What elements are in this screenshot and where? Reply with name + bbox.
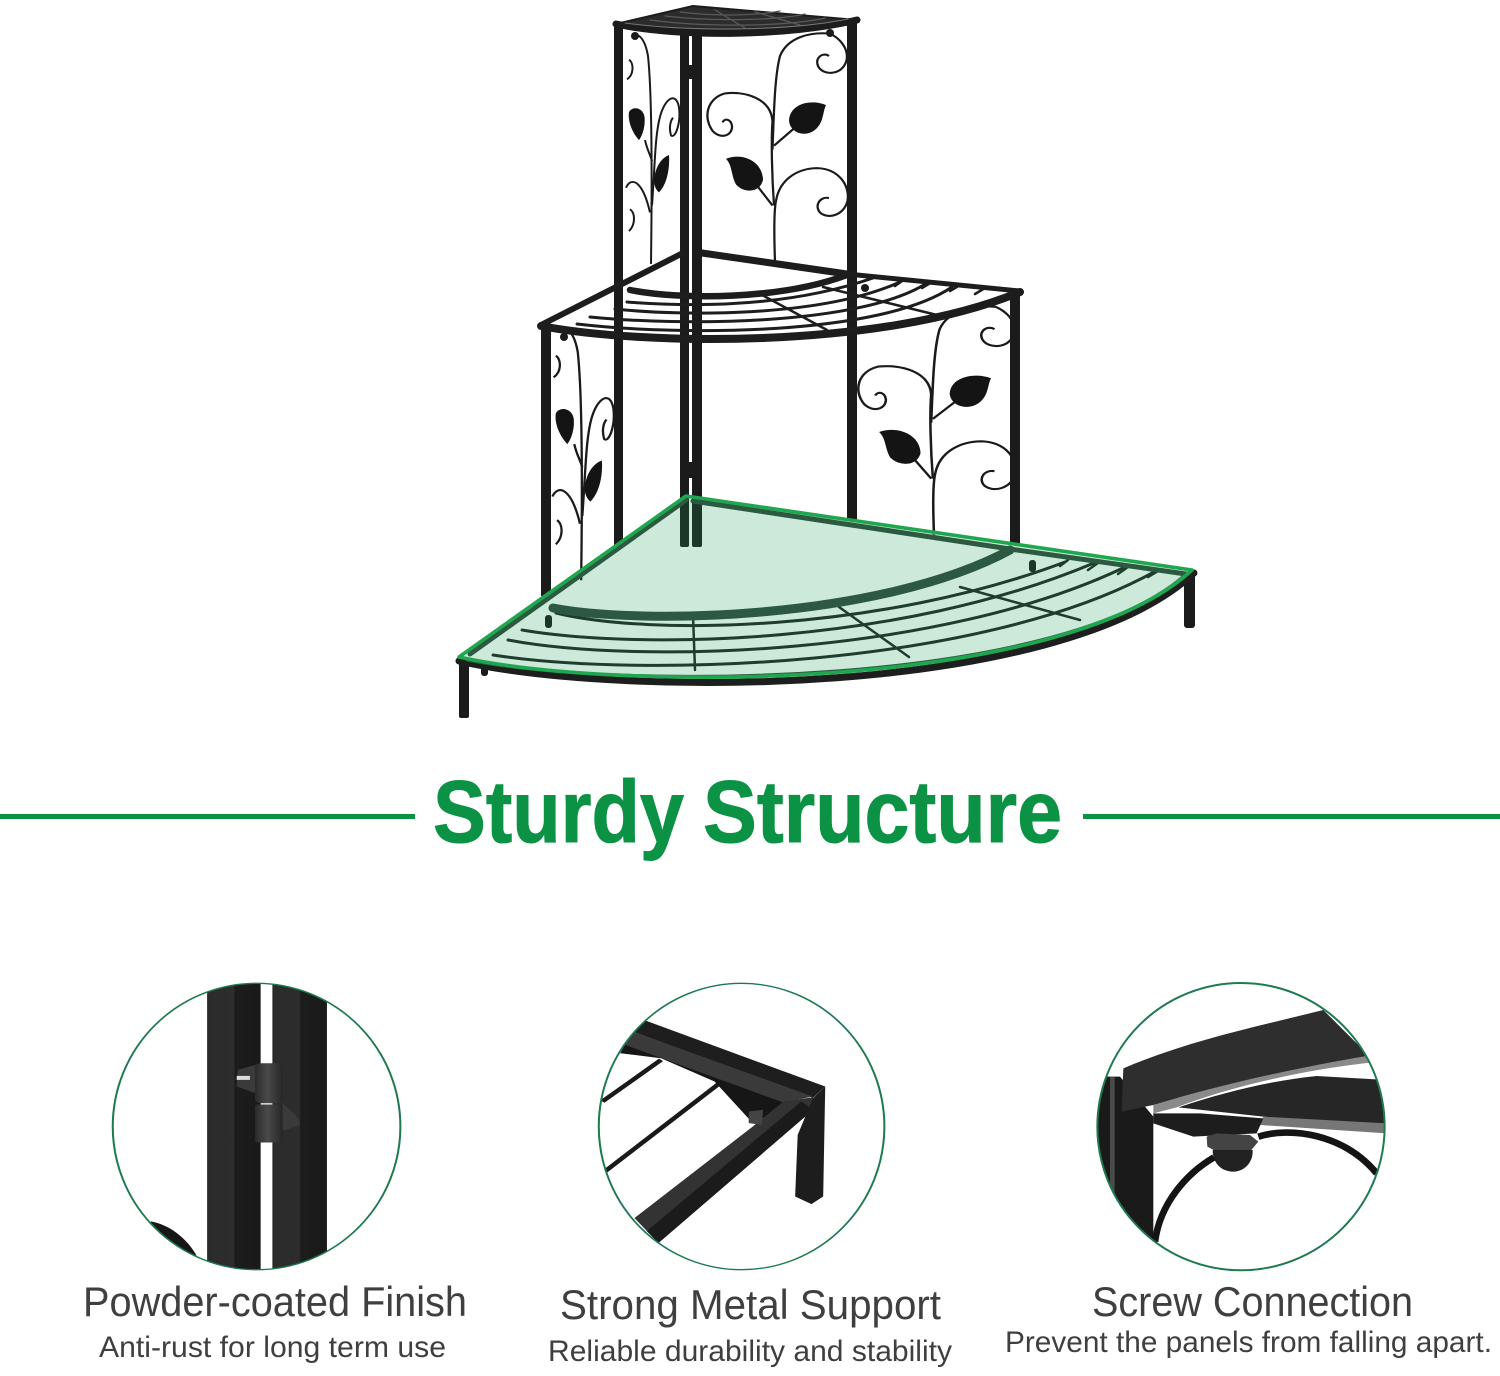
caption description: Anti-rust for long term use	[99, 1331, 446, 1364]
caption: screw connection	[1005, 1278, 1492, 1359]
caption: powder-coated finish	[83, 1278, 467, 1364]
green outline	[459, 496, 1192, 677]
caption: strong metal support	[548, 1281, 952, 1368]
divider right	[1083, 814, 1500, 819]
title: Sturdy	[433, 762, 684, 861]
detail circle: screw connection	[1097, 983, 1387, 1270]
caption description: Prevent the panels from falling apart.	[1005, 1326, 1492, 1359]
title	[433, 762, 1062, 861]
divider left	[0, 814, 415, 819]
caption description: Reliable durability and stability	[548, 1335, 952, 1368]
left side vine panels	[552, 35, 679, 580]
product illustration: three-tier corner plant stand	[459, 6, 1195, 718]
detail circle: strong metal support corner	[599, 983, 884, 1270]
top shelf	[616, 6, 857, 33]
green tint	[459, 496, 1192, 677]
bottom shelf with green highlight	[459, 496, 1195, 718]
title: Structure	[703, 762, 1062, 861]
frame posts	[541, 20, 1020, 596]
caption heading: Screw Connection	[1092, 1278, 1413, 1325]
detail circle: powder-coated finish hinge	[113, 980, 400, 1273]
black rim under front edge	[459, 573, 1194, 682]
right side vine panels	[707, 33, 1016, 535]
caption heading: Strong Metal Support	[560, 1281, 941, 1328]
shelf wire grid	[467, 500, 1186, 676]
caption heading: Powder-coated Finish	[83, 1278, 467, 1325]
middle shelf	[541, 253, 1020, 339]
shelf legs	[459, 560, 1195, 718]
